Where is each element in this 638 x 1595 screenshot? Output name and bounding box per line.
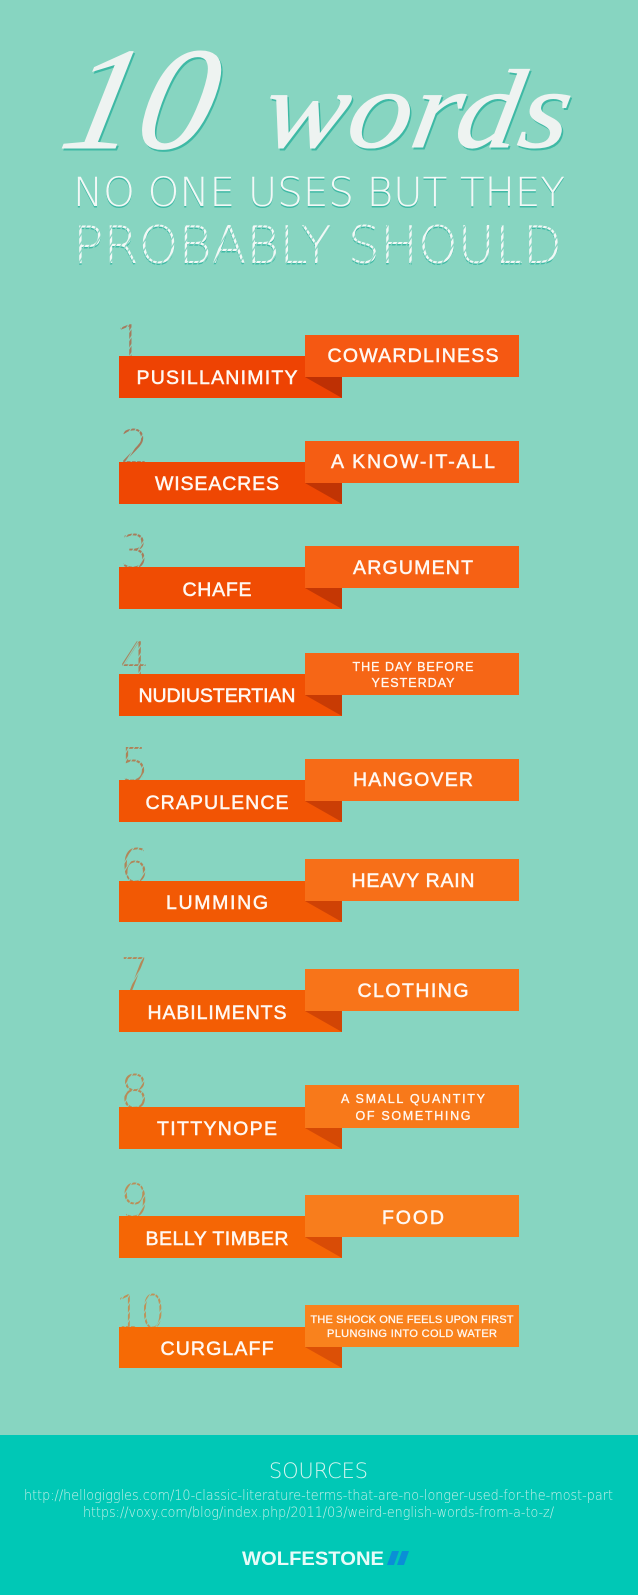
row 10: curglaff: THE SHOCK ONE FEELS UPON FIRST [310, 1314, 514, 1326]
subtitle: no one uses but they: NO ONE USES BUT THEY [73, 172, 565, 218]
row 10: curglaff: 10 [116, 1285, 165, 1339]
row 5: crapulence: CRAPULENCE [146, 792, 288, 814]
row 4: nudiustertian [119, 641, 519, 716]
row 9: belly timber: 9 [120, 1174, 149, 1228]
row 3: chafe: ARGUMENT [353, 557, 473, 579]
row 5: crapulence [119, 747, 519, 822]
row 8: tittynope: A SMALL QUANTITY [341, 1092, 486, 1106]
row 3: chafe: 3 [120, 525, 149, 579]
footer panel [0, 1435, 638, 1595]
row 7: habiliments: CLOTHING [358, 980, 468, 1002]
row 2: wiseacres [119, 428, 519, 504]
row 5: crapulence: 5 [120, 738, 149, 792]
row 8: tittynope: 8 [120, 1065, 149, 1119]
sources heading: SOURCES [269, 1459, 368, 1483]
row 10: curglaff: CURGLAFF [160, 1338, 274, 1360]
subtitle: probably should: PROBABLY SHOULD [73, 216, 562, 276]
title: 10 [50, 17, 235, 180]
row 6: lumming: 6 [120, 839, 149, 893]
row 1: pusillanimity: PUSILLANIMITY [136, 367, 298, 389]
row 1: pusillanimity: 1 [115, 315, 144, 369]
title [50, 17, 584, 182]
row 2: wiseacres: A KNOW-IT-ALL [331, 451, 495, 473]
row 4: nudiustertian: NUDIUSTERTIAN [138, 685, 296, 707]
wolfestone logo: WOLFESTONE [242, 1548, 384, 1570]
row 4: nudiustertian: YESTERDAY [372, 676, 455, 690]
row 2: wiseacres: 2 [120, 420, 149, 474]
row 1: pusillanimity [119, 324, 519, 398]
row 6: lumming [119, 848, 519, 922]
row 7: habiliments: HABILIMENTS [148, 1002, 286, 1024]
title: 10 [52, 19, 236, 182]
row 7: habiliments: 7 [120, 948, 149, 1002]
row 4: nudiustertian: THE DAY BEFORE [352, 660, 474, 674]
row 8: tittynope [119, 1074, 519, 1149]
row 2: wiseacres: WISEACRES [155, 473, 279, 495]
row 10: curglaff [119, 1294, 519, 1368]
row 9: belly timber: BELLY TIMBER [146, 1228, 288, 1250]
subtitle: probably should [79, 224, 558, 265]
row 4: nudiustertian: 4 [120, 632, 149, 686]
row 6: lumming: HEAVY RAIN [352, 870, 474, 892]
row 7: habiliments [119, 957, 519, 1032]
row 3: chafe [119, 534, 519, 609]
row 9: belly timber: FOOD [382, 1207, 444, 1229]
subtitle: no one uses but they: NO ONE USES BUT THEY [73, 170, 565, 216]
row 8: tittynope: OF SOMETHING [356, 1109, 470, 1123]
row 6: lumming: LUMMING [166, 892, 268, 914]
title: words [256, 50, 584, 174]
row 9: belly timber [119, 1182, 519, 1258]
title: words [255, 48, 582, 172]
row 10: curglaff: PLUNGING INTO COLD WATER [327, 1328, 497, 1340]
row 8: tittynope: TITTYNOPE [157, 1118, 277, 1140]
row 1: pusillanimity: COWARDLINESS [328, 345, 498, 367]
row 3: chafe: CHAFE [182, 579, 252, 601]
source links: https://voxy.com/blog/index.php/2011/03/weird-english-words-from-a-to-z/ [83, 1505, 554, 1521]
source links [24, 1488, 613, 1521]
row 5: crapulence: HANGOVER [353, 769, 473, 791]
subtitle: probably should: PROBABLY SHOULD [73, 218, 562, 278]
